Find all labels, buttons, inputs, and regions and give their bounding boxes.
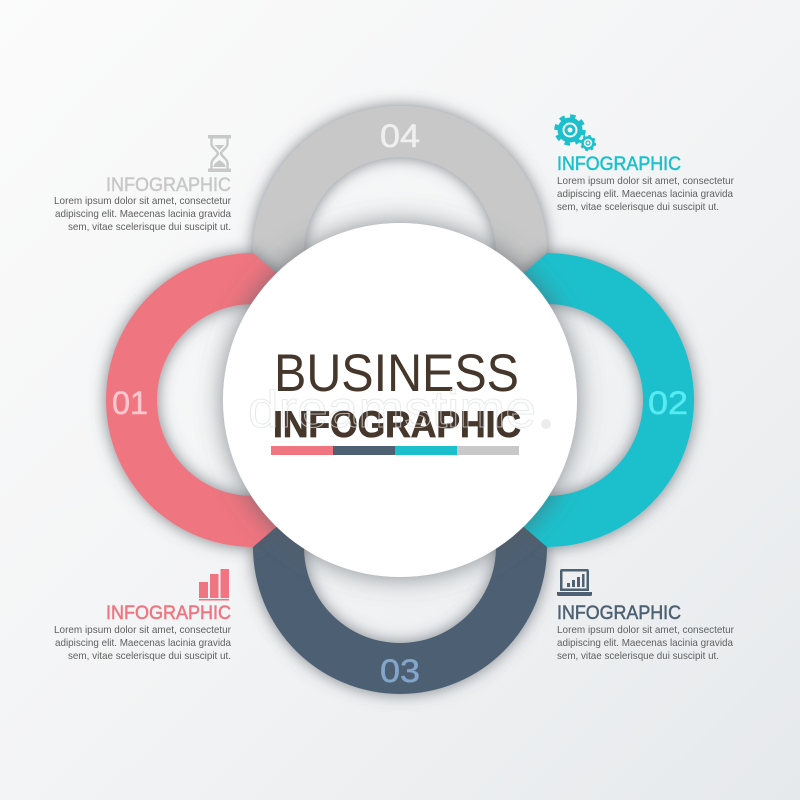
body text [54, 196, 232, 233]
body text: adipiscing elit. Maecenas lacinia gravida [55, 638, 231, 649]
number 01: 01 [112, 385, 148, 421]
icon: hourglass [208, 135, 231, 172]
ring 02: teal right arc [518, 242, 705, 558]
body text: sem, vitae scelerisque dui suscipit ut. [557, 651, 719, 662]
title: infographic: INFOGRAPHIC [273, 403, 521, 445]
icon: gears [556, 116, 595, 150]
block: top left [54, 135, 232, 233]
heading: INFOGRAPHIC [106, 174, 231, 196]
ring 01: coral left arc [94, 242, 282, 558]
body text: sem, vitae scelerisque dui suscipit ut. [68, 651, 231, 662]
body text [54, 625, 232, 662]
body text: adipiscing elit. Maecenas lacinia gravida [557, 638, 733, 649]
body text: Lorem ipsum dolor sit amet, consectetur [54, 625, 232, 636]
block: bottom left [54, 569, 232, 662]
body text: sem, vitae scelerisque dui suscipit ut. [557, 202, 719, 213]
block: bottom right [557, 569, 735, 662]
ring 03: navy bottom arc [253, 400, 547, 694]
central white circle [223, 223, 577, 577]
heading: INFOGRAPHIC [557, 153, 681, 175]
title: business: BUSINESS [274, 344, 519, 403]
body text: Lorem ipsum dolor sit amet, consectetur [54, 196, 232, 207]
heading: INFOGRAPHIC [106, 602, 231, 624]
body text [557, 625, 735, 662]
body text: Lorem ipsum dolor sit amet, consectetur [557, 176, 735, 187]
ring 04: grey top arc [253, 106, 547, 400]
icon: bar chart [199, 569, 229, 600]
body text: Lorem ipsum dolor sit amet, consectetur [557, 625, 735, 636]
body text [557, 176, 735, 213]
heading: INFOGRAPHIC [557, 602, 681, 624]
number 03: 03 [380, 653, 420, 689]
number 02: 02 [648, 385, 688, 421]
body text: adipiscing elit. Maecenas lacinia gravida [55, 209, 231, 220]
icon: laptop [557, 569, 592, 596]
colour bar [271, 446, 519, 455]
block: top right [556, 116, 735, 213]
watermark: dreamstime [248, 381, 536, 439]
number 04: 04 [380, 118, 420, 154]
body text: adipiscing elit. Maecenas lacinia gravida [557, 189, 733, 200]
body text: sem, vitae scelerisque dui suscipit ut. [68, 222, 231, 233]
